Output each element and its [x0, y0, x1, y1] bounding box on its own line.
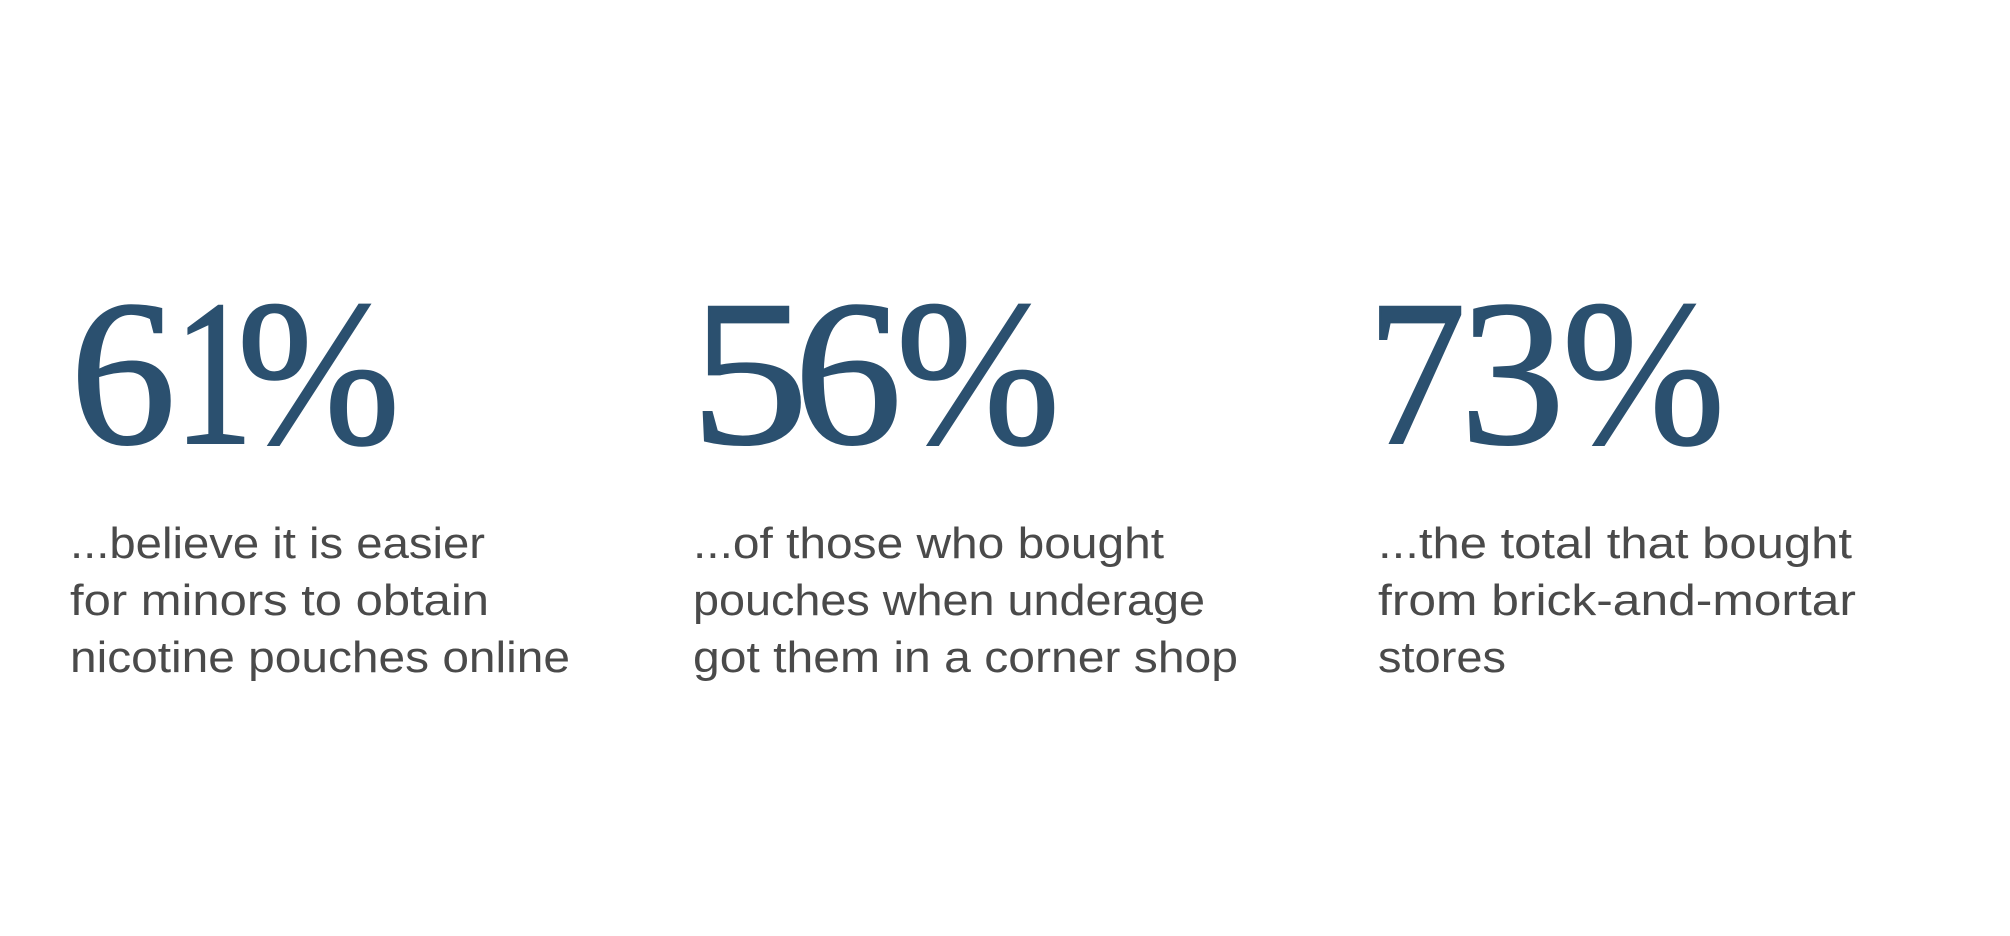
number: 56%: 6 [794, 258, 902, 488]
number: 61% [70, 258, 400, 488]
number: 61%: % [237, 258, 400, 488]
description: 56%: pouches when underage [693, 576, 1205, 625]
number: 61%: 6 [70, 258, 176, 488]
description: 61%: nicotine pouches online [70, 633, 570, 682]
number: 56% [690, 258, 1060, 488]
number: 73%: % [1562, 258, 1725, 488]
description: 61%: ...believe it is easier [70, 519, 485, 568]
panel: statistic 73% [1367, 258, 1856, 682]
description: 61% [70, 519, 570, 682]
description: 61%: for minors to obtain [70, 576, 489, 625]
panel: statistic 56% [690, 258, 1238, 682]
number: 73%: 7 [1367, 258, 1466, 488]
number: 73%: 3 [1460, 258, 1565, 488]
description: 56%: ...of those who bought [693, 519, 1164, 568]
number: 56%: 5 [690, 258, 809, 488]
description: 56%: got them in a corner shop [693, 633, 1238, 682]
number: 56%: % [896, 258, 1060, 488]
description: 73%: from brick-and-mortar [1378, 576, 1856, 625]
description: 73% [1378, 519, 1856, 682]
description: 73%: ...the total that bought [1378, 519, 1852, 568]
number: 73% [1367, 258, 1725, 488]
panel: statistic 61% [70, 258, 570, 682]
description: 73%: stores [1378, 633, 1506, 682]
description: 56% [693, 519, 1238, 682]
number: 61%: 1 [174, 258, 253, 488]
